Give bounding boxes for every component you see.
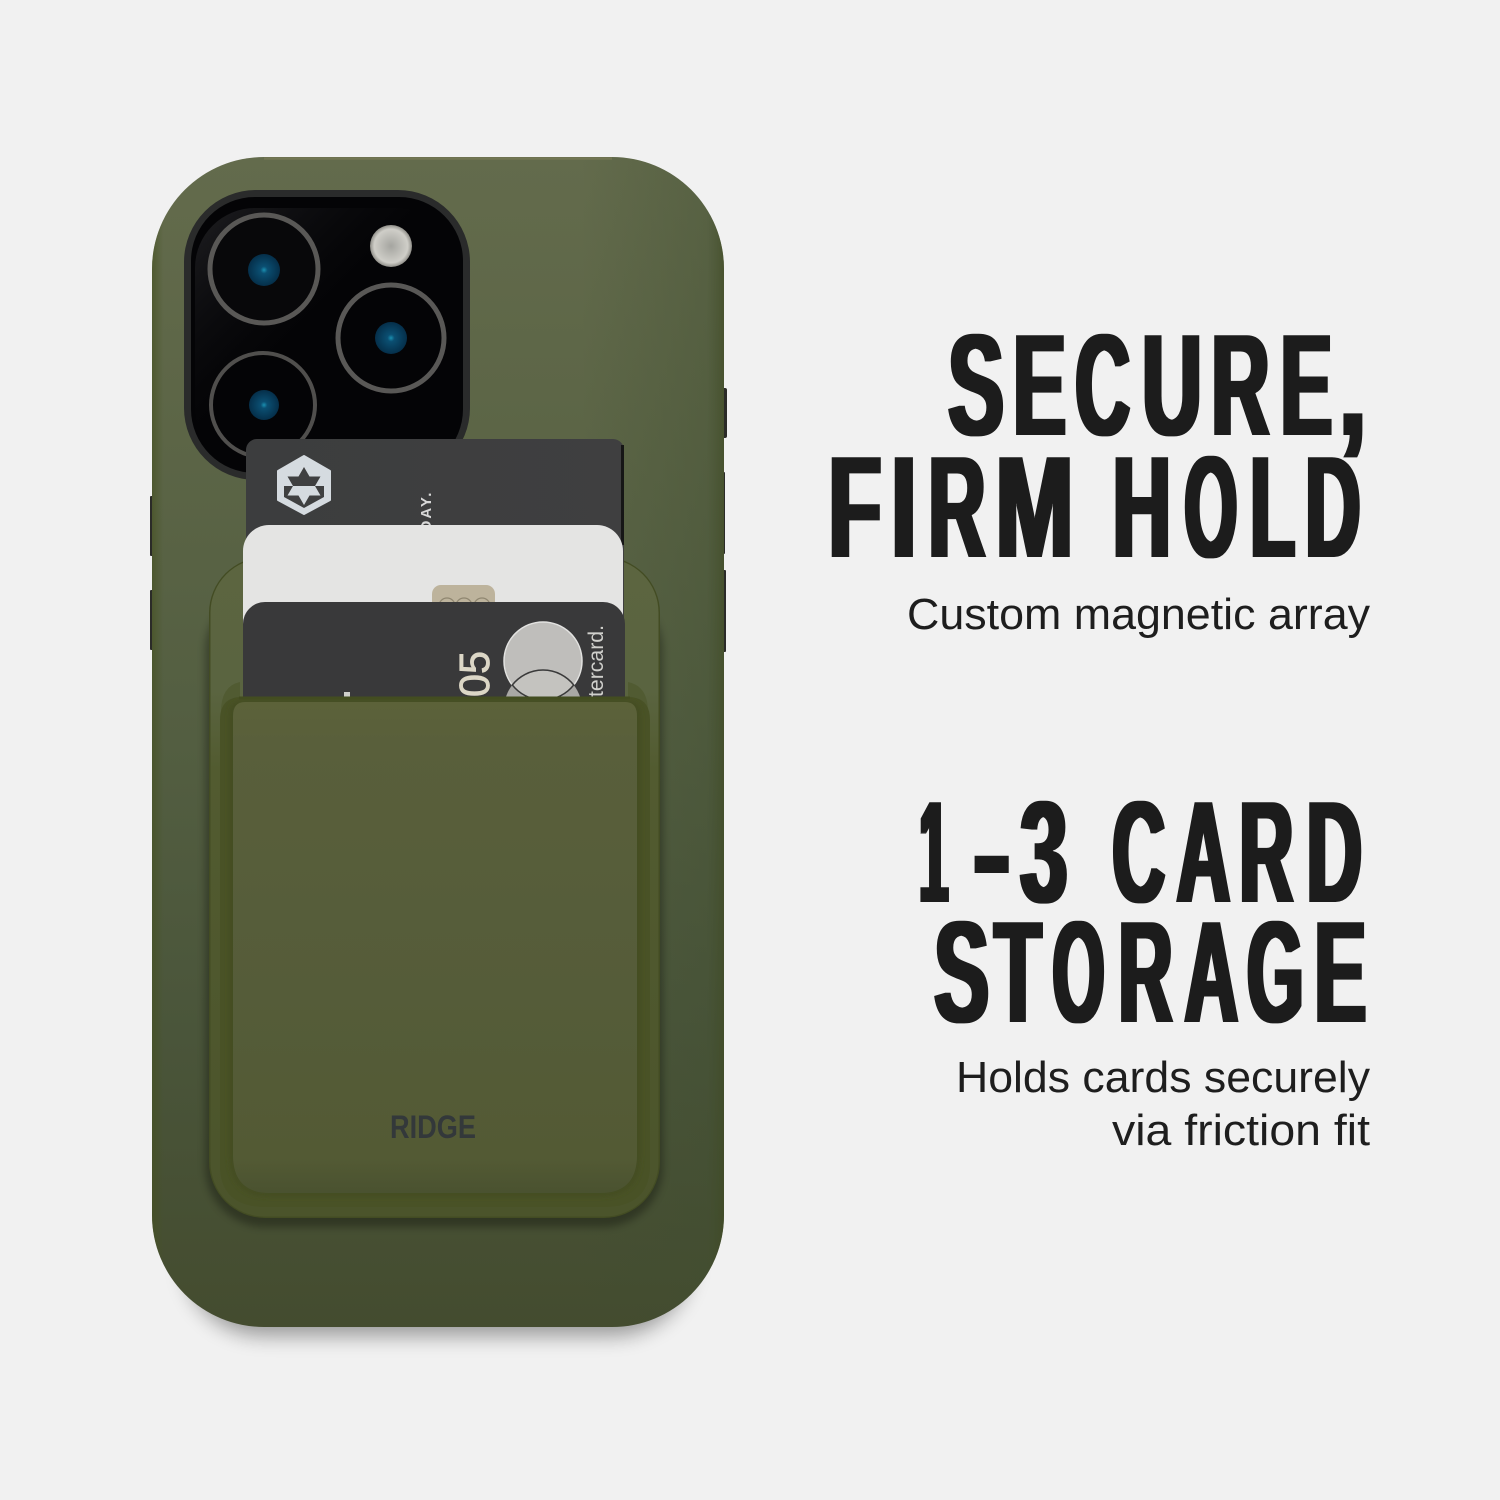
heading: secure, firm hold: U [1142,304,1202,466]
cards [243,439,625,696]
heading: secure, firm hold: C [1075,304,1130,466]
card: mastercard [243,602,625,696]
phone case [150,157,727,1336]
heading: secure, firm hold: H [1113,426,1171,588]
heading: secure, firm hold: E [1281,304,1332,466]
ultrawide lens [211,353,315,457]
side buttons [150,388,727,652]
case body [152,157,724,1327]
heading: secure, firm hold: D [1305,426,1360,588]
heading: 1-3 card storage [920,770,1366,1053]
heading: 1-3 card storage: T [994,890,1041,1053]
card: white card [243,525,623,624]
heading: 1-3 card storage: E [1315,890,1366,1053]
card number: 05 [451,651,499,697]
heading: secure, firm hold: R [1211,304,1269,466]
heading: secure, firm hold: S [948,304,1004,466]
camera module [184,190,470,480]
flash [370,225,412,267]
wallet front pocket [220,682,650,1207]
heading: 1-3 card storage: - [973,770,1011,933]
subtext: holds cards securely via friction fit [956,1053,1370,1155]
heading: 1-3 card storage: R [1239,770,1293,933]
card text: TODAY. [418,491,435,556]
heading: 1-3 card storage: R [1119,890,1172,1053]
card: black logo card [246,439,624,618]
mastercard logo [503,621,583,696]
main lens [210,215,318,323]
heading: secure, firm hold: I [891,426,917,588]
drop shadow [185,1190,691,1336]
subtext: holds cards securely via friction fit: Holds cards securely [956,1053,1370,1102]
subtext: holds cards securely via friction fit: via friction fit [1112,1106,1370,1155]
heading: 1-3 card storage: A [1177,770,1230,933]
heading: 1-3 card storage: 3 [1020,770,1067,933]
card logo [278,456,330,514]
heading: secure, firm hold: L [1250,426,1295,588]
heading: secure, firm hold [828,304,1366,588]
heading: 1-3 card storage: A [1185,890,1238,1053]
heading: 1-3 card storage: D [1307,770,1362,933]
heading: 1-3 card storage: 1 [920,770,948,933]
card brand text: tercard. [585,625,608,697]
subtext: custom magnetic array: Custom magnetic array [907,590,1370,639]
heading: 1-3 card storage: O [1053,890,1104,1053]
heading: secure, firm hold: F [828,426,881,588]
heading: 1-3 card storage: C [1112,770,1165,933]
heading: 1-3 card storage: S [934,890,989,1053]
heading: secure, firm hold: M [996,426,1074,588]
heading: secure, firm hold: E [1013,304,1066,466]
heading: 1-3 card storage: G [1247,890,1303,1053]
wallet brand: RIDGE: RIDGE [390,1109,476,1145]
telephoto lens [338,285,444,391]
wallet back [205,557,663,1227]
heading: secure, firm hold: , [1339,304,1366,466]
heading: secure, firm hold: R [928,426,985,588]
card chip [432,585,495,602]
heading: secure, firm hold: O [1185,426,1237,588]
